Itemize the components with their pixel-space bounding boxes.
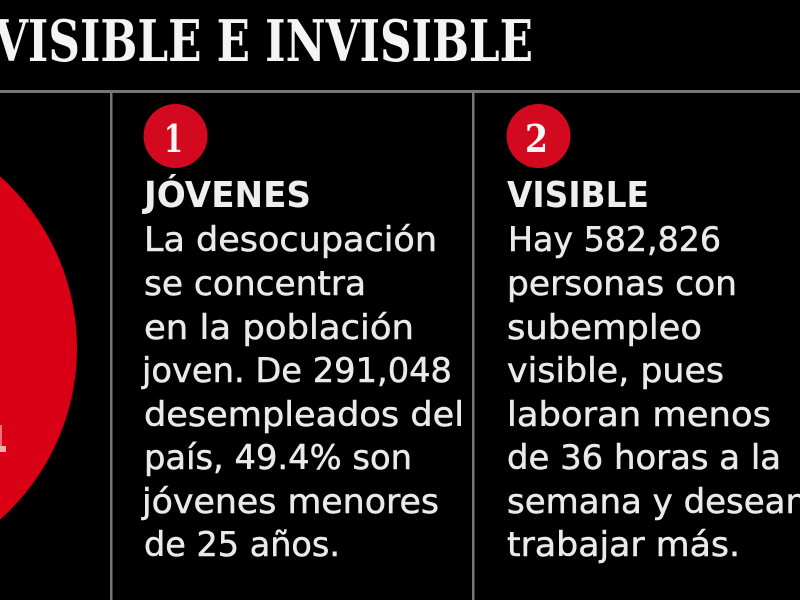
body text: visible: Hay 582,826 [508, 220, 721, 260]
red pie chart circle [0, 118, 77, 578]
body text: jóvenes [141, 220, 464, 565]
body text: jóvenes: de 25 años. [144, 525, 340, 565]
badge 1 [144, 104, 208, 168]
badge 2: 2 [525, 116, 548, 161]
body text: jóvenes: desempleados del [144, 395, 464, 435]
body text: visible: visible, pues [507, 351, 724, 391]
body text: visible: personas con [507, 264, 737, 304]
body text: jóvenes: jóvenes menores [141, 482, 439, 522]
badge 1: 1 [164, 116, 183, 161]
body text: visible [507, 220, 800, 565]
body text: visible: semana y desean [507, 482, 800, 522]
badge 2 [506, 104, 570, 168]
body text: jóvenes: país, 49.4% son [144, 438, 412, 478]
heading: jóvenes: JÓVENES [141, 174, 311, 216]
column divider right [472, 91, 474, 600]
title: VISIBLE E INVISIBLE [0, 8, 533, 75]
header rule [0, 90, 800, 93]
panel: visible [506, 104, 800, 565]
body text: visible: trabajar más. [507, 525, 740, 565]
body text: jóvenes: se concentra [144, 264, 366, 304]
body text: visible: subempleo [507, 308, 702, 348]
body text: visible: de 36 horas a la [507, 438, 781, 478]
body text: jóvenes: La desocupación [144, 220, 437, 260]
body text: visible: laboran menos [507, 395, 771, 435]
body text: jóvenes: en la población [144, 308, 414, 348]
heading: visible: VISIBLE [507, 175, 649, 216]
panel: jóvenes [141, 104, 464, 565]
column divider left [110, 91, 112, 600]
body text: jóvenes: joven. De 291,048 [141, 351, 452, 391]
